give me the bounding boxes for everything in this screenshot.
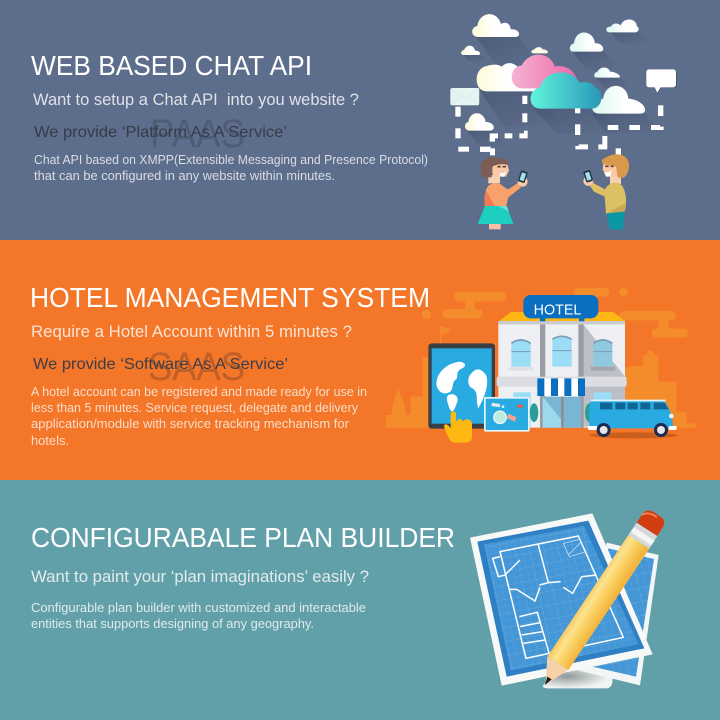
- cloud: right white: [592, 86, 645, 114]
- description: plan builder: Configurable plan builder with customized and interactable: [31, 601, 366, 615]
- cloud: center upper: [570, 32, 603, 52]
- subheading: chat api question: Want to setup a Chat API into you website ?: [33, 90, 359, 109]
- cloud: top right: [606, 20, 639, 32]
- illustration: hotel with tablet and bus: [386, 288, 696, 443]
- icon: speech bubble: [646, 69, 677, 93]
- cloud: small left: [461, 46, 480, 55]
- cloud: top left: [472, 14, 519, 37]
- icon: envelope: [450, 88, 480, 106]
- tagline: platform as a service: We provide ‘Platform As A Service’: [34, 124, 287, 141]
- cloud: lower left: [465, 113, 494, 131]
- subheading: plan question: Want to paint your ‘plan imaginations’ easily ?: [31, 567, 369, 586]
- tagline: software as a service: We provide ‘Software As A Service’: [33, 356, 288, 373]
- description: plan builder: [31, 601, 366, 631]
- cloud shadows: [463, 32, 662, 147]
- subheading: hotel question: Require a Hotel Account within 5 minutes ?: [31, 322, 352, 341]
- pencil: [545, 511, 664, 685]
- hotel sign: HOTEL: [534, 302, 581, 318]
- cloud: teal: [531, 72, 602, 109]
- figure: woman with phone: [478, 157, 528, 229]
- panel: hotel management system: [0, 240, 720, 480]
- description: hotel: application/module with service tracking mechanism for: [31, 417, 349, 431]
- front blueprint sheet: [470, 513, 653, 686]
- panel: web based chat api: [0, 0, 720, 240]
- illustration: blueprint and pencil: [470, 511, 664, 688]
- cloud: pink: [512, 55, 578, 88]
- description: hotel: A hotel account can be registered and made ready for use in: [31, 385, 367, 399]
- dashed connectors: [455, 96, 664, 155]
- stand shadow: [543, 668, 613, 688]
- tablet with globe: [428, 343, 495, 429]
- cloud: small right: [594, 67, 620, 78]
- blue bus: [588, 400, 677, 438]
- watermark: SAAS: SAAS: [148, 345, 245, 389]
- panel: configurable plan builder: [0, 480, 720, 720]
- hotel building: [497, 295, 627, 428]
- description: chat api: Chat API based on XMPP(Extensible Messaging and Presence Protocol): [34, 153, 428, 167]
- floor plan: [493, 536, 623, 658]
- description: chat api: [34, 153, 428, 183]
- figure: man with phone: [583, 154, 629, 229]
- description: hotel: less than 5 minutes. Service request, delegate and delivery: [31, 401, 359, 415]
- heading: plan builder: CONFIGURABALE PLAN BUILDER: [31, 522, 455, 553]
- watermark: PAAS: PAAS: [150, 112, 245, 156]
- description: hotel: [31, 385, 367, 448]
- cloud: large white: [477, 63, 538, 91]
- back blueprint sheet: [577, 543, 659, 685]
- heading: chat api: WEB BASED CHAT API: [31, 50, 312, 81]
- city skyline and clouds background: [386, 288, 696, 428]
- heading: hotel management: HOTEL MANAGEMENT SYSTEM: [30, 282, 430, 313]
- description: hotel: hotels.: [31, 434, 69, 448]
- description: plan builder: entities that supports designing of any geography.: [31, 617, 314, 631]
- postcard: [484, 397, 530, 432]
- cloud: small center: [531, 47, 548, 53]
- icon: pointing hand: [444, 411, 472, 443]
- illustration: clouds and people chatting: [450, 14, 677, 229]
- description: chat api: that can be configured in any website within minutes.: [34, 169, 335, 183]
